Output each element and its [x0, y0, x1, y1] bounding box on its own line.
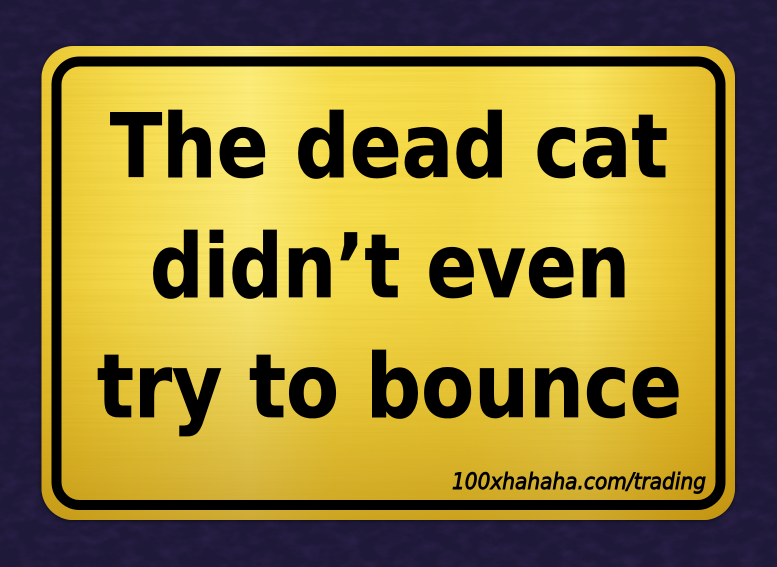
- headline line 3: try to bounce: [97, 335, 682, 438]
- headline line 2: didn’t even: [150, 215, 630, 318]
- headline: [97, 95, 682, 438]
- headline line 1: The dead cat: [110, 95, 668, 198]
- gold plate: [42, 46, 735, 520]
- source url: 100xhahaha.com/trading: [452, 470, 706, 495]
- black inset border: [56, 62, 720, 505]
